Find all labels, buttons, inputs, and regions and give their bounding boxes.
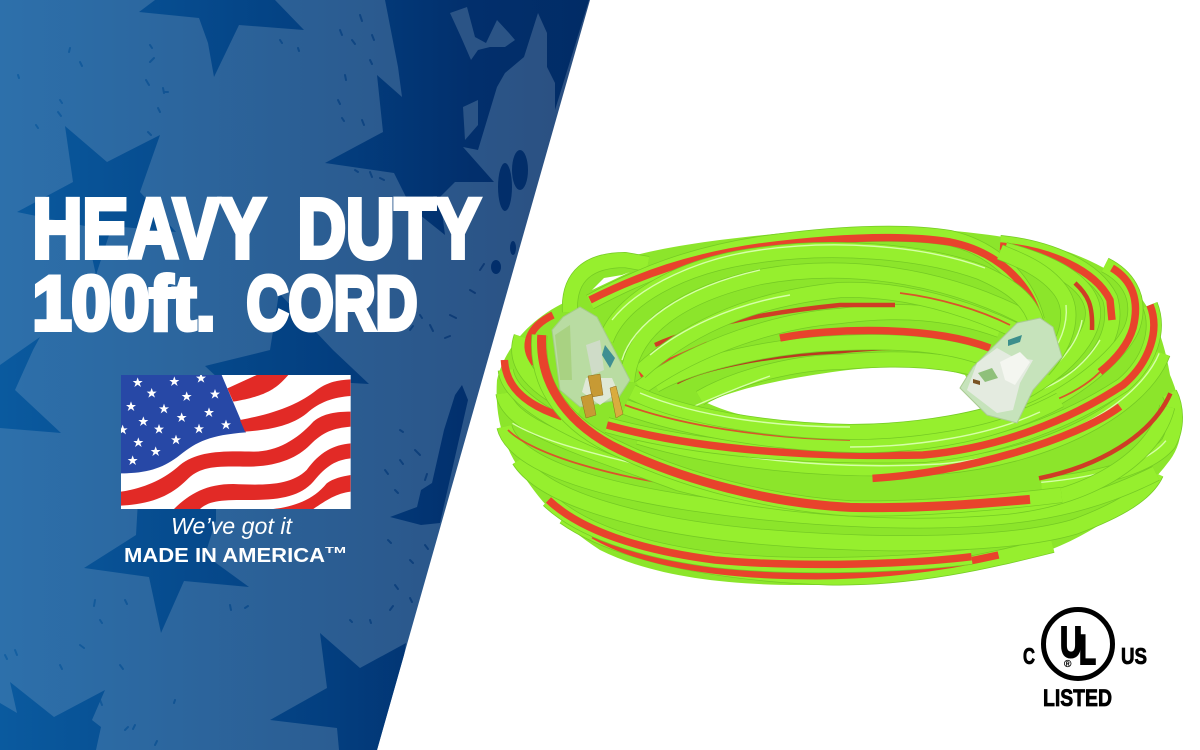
- upper middle strands: [606, 245, 1036, 408]
- us label: US: [1121, 643, 1147, 669]
- product: green and red coiled extension cord: [497, 227, 1181, 585]
- UL circle: [1044, 610, 1112, 678]
- made in america: MADE IN AMERICA: [124, 544, 325, 567]
- panel: blue distressed star background: [0, 0, 600, 750]
- tagline script: We’ve got it: [171, 513, 294, 539]
- registered mark: ®: [1064, 659, 1072, 670]
- grunge specks: [5, 15, 484, 745]
- UL letters: U: [1060, 618, 1082, 667]
- flag canton: [121, 375, 246, 473]
- outer right strands and lower coils: [504, 353, 1175, 577]
- icon: waving American flag: [118, 373, 351, 509]
- upper back strands: [570, 234, 1135, 412]
- hole rim strands: [607, 305, 1154, 455]
- tagline: [124, 513, 347, 567]
- flag stripes: [121, 375, 351, 509]
- title word: heavy: HEAVY: [32, 182, 266, 276]
- listed label: LISTED: [1043, 685, 1112, 712]
- background stars: [0, 0, 589, 750]
- UL listed certification mark: L: [1079, 626, 1096, 673]
- title: [32, 182, 480, 346]
- trademark: TM: [325, 546, 347, 555]
- distressed lighter patches: [450, 7, 515, 140]
- cord silhouette: [497, 227, 1181, 585]
- UL listed certification mark: [1023, 610, 1147, 712]
- title word: 100ft.: 100ft.: [32, 262, 216, 346]
- flag stars: [118, 373, 231, 465]
- c label: C: [1023, 643, 1035, 669]
- small gap inside plug loop: [592, 272, 630, 290]
- title word: duty: DUTY: [298, 182, 480, 276]
- title word: cord: CORD: [246, 262, 418, 346]
- male plug: [552, 307, 630, 418]
- female socket: [960, 318, 1062, 423]
- left side coils and main red stripe: [504, 315, 1061, 509]
